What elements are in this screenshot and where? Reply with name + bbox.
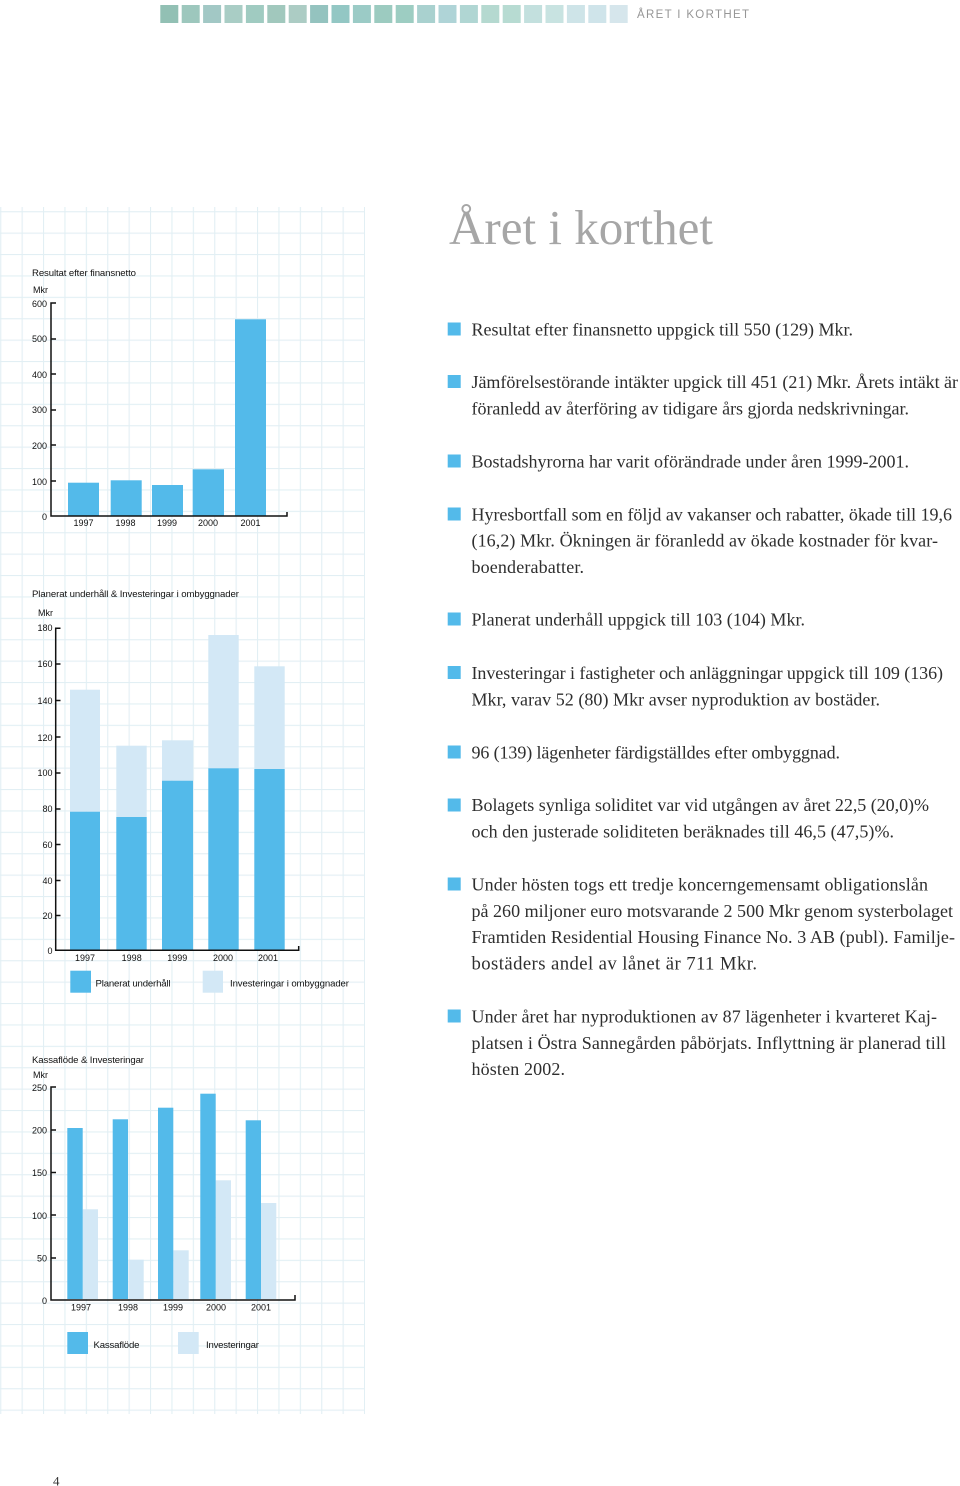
chart: Resultat efter finansnetto bbox=[32, 268, 287, 528]
bullet: bostadshyror: Bostadshyrorna har varit oförändrade under åren 1999-2001. bbox=[472, 452, 909, 472]
unit label: Mkr bbox=[33, 285, 48, 295]
bullet: jämförelsestörande: Jämförelsestörande intäkter upgick till 451 (21) Mkr. Årets intäkt är bbox=[472, 372, 958, 393]
y axis labels: 120 bbox=[37, 733, 52, 743]
y axis labels: 600 bbox=[32, 299, 47, 309]
bullet: nyproduktion: hösten 2002. bbox=[472, 1059, 565, 1079]
bullet list bbox=[448, 320, 958, 1079]
x axis labels: 1997 bbox=[75, 953, 95, 963]
bullet: lägenheter: 96 (139) lägenheter färdigställdes efter ombyggnad. bbox=[472, 742, 840, 764]
bullet: hyresbortfall: (16,2) Mkr. Ökningen är föranledd av ökade kostnader för kvar- bbox=[472, 531, 938, 552]
chart title: Planerat underhåll & Investeringar i ombyggnader bbox=[32, 589, 240, 600]
bullet: planerat underhåll: Planerat underhåll uppgick till 103 (104) Mkr. bbox=[472, 610, 805, 630]
y axis labels: 0 bbox=[42, 1296, 47, 1306]
bars bbox=[68, 319, 266, 516]
y axis labels: 300 bbox=[32, 405, 47, 415]
bullet: jämförelsestörande bbox=[448, 372, 958, 418]
y axis labels: 20 bbox=[42, 911, 52, 921]
bullet: obligationslån: Under hösten togs ett tredje koncerngemensamt obligationslån bbox=[472, 874, 928, 894]
bullet: jämförelsestörande: föranledd av återföring av tidigare års gjorda nedskrivningar. bbox=[472, 398, 909, 418]
chart title: Resultat efter finansnetto bbox=[32, 268, 136, 279]
dark bars bbox=[70, 768, 285, 950]
legend: Planerat underhåll bbox=[96, 978, 170, 990]
x axis labels: 1997 bbox=[73, 518, 94, 528]
y axis labels: 80 bbox=[42, 804, 52, 814]
y axis labels: 400 bbox=[32, 370, 47, 380]
legend: Investeringar bbox=[206, 1340, 260, 1351]
chart: Planerat underhåll & Investeringar i ombyggnader bbox=[32, 589, 350, 993]
axes and ticks bbox=[51, 303, 287, 516]
y axis labels: 40 bbox=[42, 876, 52, 886]
y axis labels bbox=[37, 623, 52, 956]
bullet: soliditet: Bolagets synliga soliditet var vid utgången av året 22,5 (20,0)% bbox=[472, 795, 929, 816]
axes and ticks bbox=[51, 1087, 295, 1300]
y axis labels: 0 bbox=[42, 512, 47, 522]
y axis labels: 100 bbox=[32, 1211, 47, 1221]
y axis labels: 0 bbox=[47, 946, 52, 956]
y axis labels: 140 bbox=[37, 696, 52, 706]
unit label: Mkr bbox=[38, 608, 53, 618]
bullet: nyproduktion: Under året har nyproduktionen av 87 lägenheter i kvarteret Kaj- bbox=[472, 1006, 937, 1026]
legend bbox=[70, 971, 350, 993]
chart title: Kassaflöde & Investeringar bbox=[32, 1055, 145, 1066]
bullet: nyproduktion: platsen i Östra Sannegården påbörjats. Inflyttning är planerad till bbox=[472, 1033, 946, 1053]
bullet: hyresbortfall bbox=[448, 504, 952, 577]
y axis labels: 160 bbox=[37, 659, 52, 669]
light bars bbox=[70, 635, 285, 817]
bullet: soliditet bbox=[448, 795, 929, 843]
legend bbox=[67, 1332, 260, 1354]
x axis labels: 1999 bbox=[167, 953, 187, 963]
bullet: obligationslån bbox=[448, 874, 955, 975]
bullet: hyresbortfall: boenderabatter. bbox=[472, 557, 584, 577]
legend: Kassaflöde bbox=[94, 1340, 140, 1351]
x axis labels bbox=[73, 518, 261, 528]
x axis labels: 2000 bbox=[206, 1302, 226, 1312]
x axis labels: 1999 bbox=[157, 518, 177, 528]
bullet: obligationslån: bostäders andel av lånet är 711 Mkr. bbox=[472, 954, 757, 975]
grid background bbox=[0, 207, 365, 1414]
x axis labels: 2001 bbox=[258, 953, 278, 963]
chart: Kassaflöde & Investeringar bbox=[32, 1055, 295, 1354]
main title: Året i korthet bbox=[449, 200, 713, 255]
y axis labels: 180 bbox=[37, 623, 52, 633]
dark bars bbox=[67, 1094, 261, 1299]
x axis labels: 1998 bbox=[118, 1302, 138, 1312]
axes and ticks bbox=[56, 628, 299, 950]
x axis labels: 1997 bbox=[71, 1302, 91, 1312]
unit label: Mkr bbox=[33, 1070, 48, 1080]
bullet: nyproduktion bbox=[448, 1006, 946, 1079]
y axis labels: 250 bbox=[32, 1083, 47, 1093]
x axis labels: 1999 bbox=[163, 1302, 183, 1312]
x axis labels bbox=[71, 1302, 271, 1312]
bullet: soliditet: och den justerade soliditeten beräknades till 46,5 (47,5)%. bbox=[472, 822, 894, 843]
x axis labels: 2000 bbox=[198, 518, 218, 528]
y axis labels: 200 bbox=[32, 1126, 47, 1136]
bullet: obligationslån: Framtiden Residential Housing Finance No. 3 AB (publ). Familje- bbox=[472, 927, 955, 948]
header strip of squares bbox=[160, 5, 628, 23]
y axis labels: 100 bbox=[32, 477, 47, 487]
header label: ÅRET I KORTHET bbox=[637, 8, 749, 21]
bullet: investeringar bbox=[448, 663, 943, 710]
y axis labels bbox=[32, 299, 47, 522]
bullet: investeringar: Investeringar i fastigheter och anläggningar uppgick till 109 (136) bbox=[472, 663, 943, 684]
y axis labels: 100 bbox=[37, 768, 52, 778]
bullet: resultat: Resultat efter finansnetto uppgick till 550 (129) Mkr. bbox=[472, 320, 853, 340]
y axis labels: 60 bbox=[42, 840, 52, 850]
x axis labels: 2001 bbox=[240, 518, 261, 528]
y axis labels bbox=[32, 1083, 47, 1306]
legend: Investeringar i ombyggnader bbox=[230, 978, 350, 990]
x axis labels: 2001 bbox=[251, 1302, 271, 1312]
x axis labels bbox=[75, 953, 278, 963]
y axis labels: 500 bbox=[32, 334, 47, 344]
bullet: obligationslån: på 260 miljoner euro motsvarande 2 500 Mkr genom systerbolaget bbox=[472, 901, 953, 921]
x axis labels: 2000 bbox=[213, 953, 233, 963]
bullet: hyresbortfall: Hyresbortfall som en följd av vakanser och rabatter, ökade till 19,6 bbox=[472, 504, 952, 524]
x axis labels: 1998 bbox=[115, 518, 136, 528]
bullet: investeringar: Mkr, varav 52 (80) Mkr avser nyproduktion av bostäder. bbox=[472, 689, 880, 710]
x axis labels: 1998 bbox=[122, 953, 142, 963]
light bars bbox=[83, 1180, 276, 1299]
y axis labels: 200 bbox=[32, 441, 47, 451]
y axis labels: 50 bbox=[37, 1254, 47, 1264]
y axis labels: 150 bbox=[32, 1168, 47, 1178]
